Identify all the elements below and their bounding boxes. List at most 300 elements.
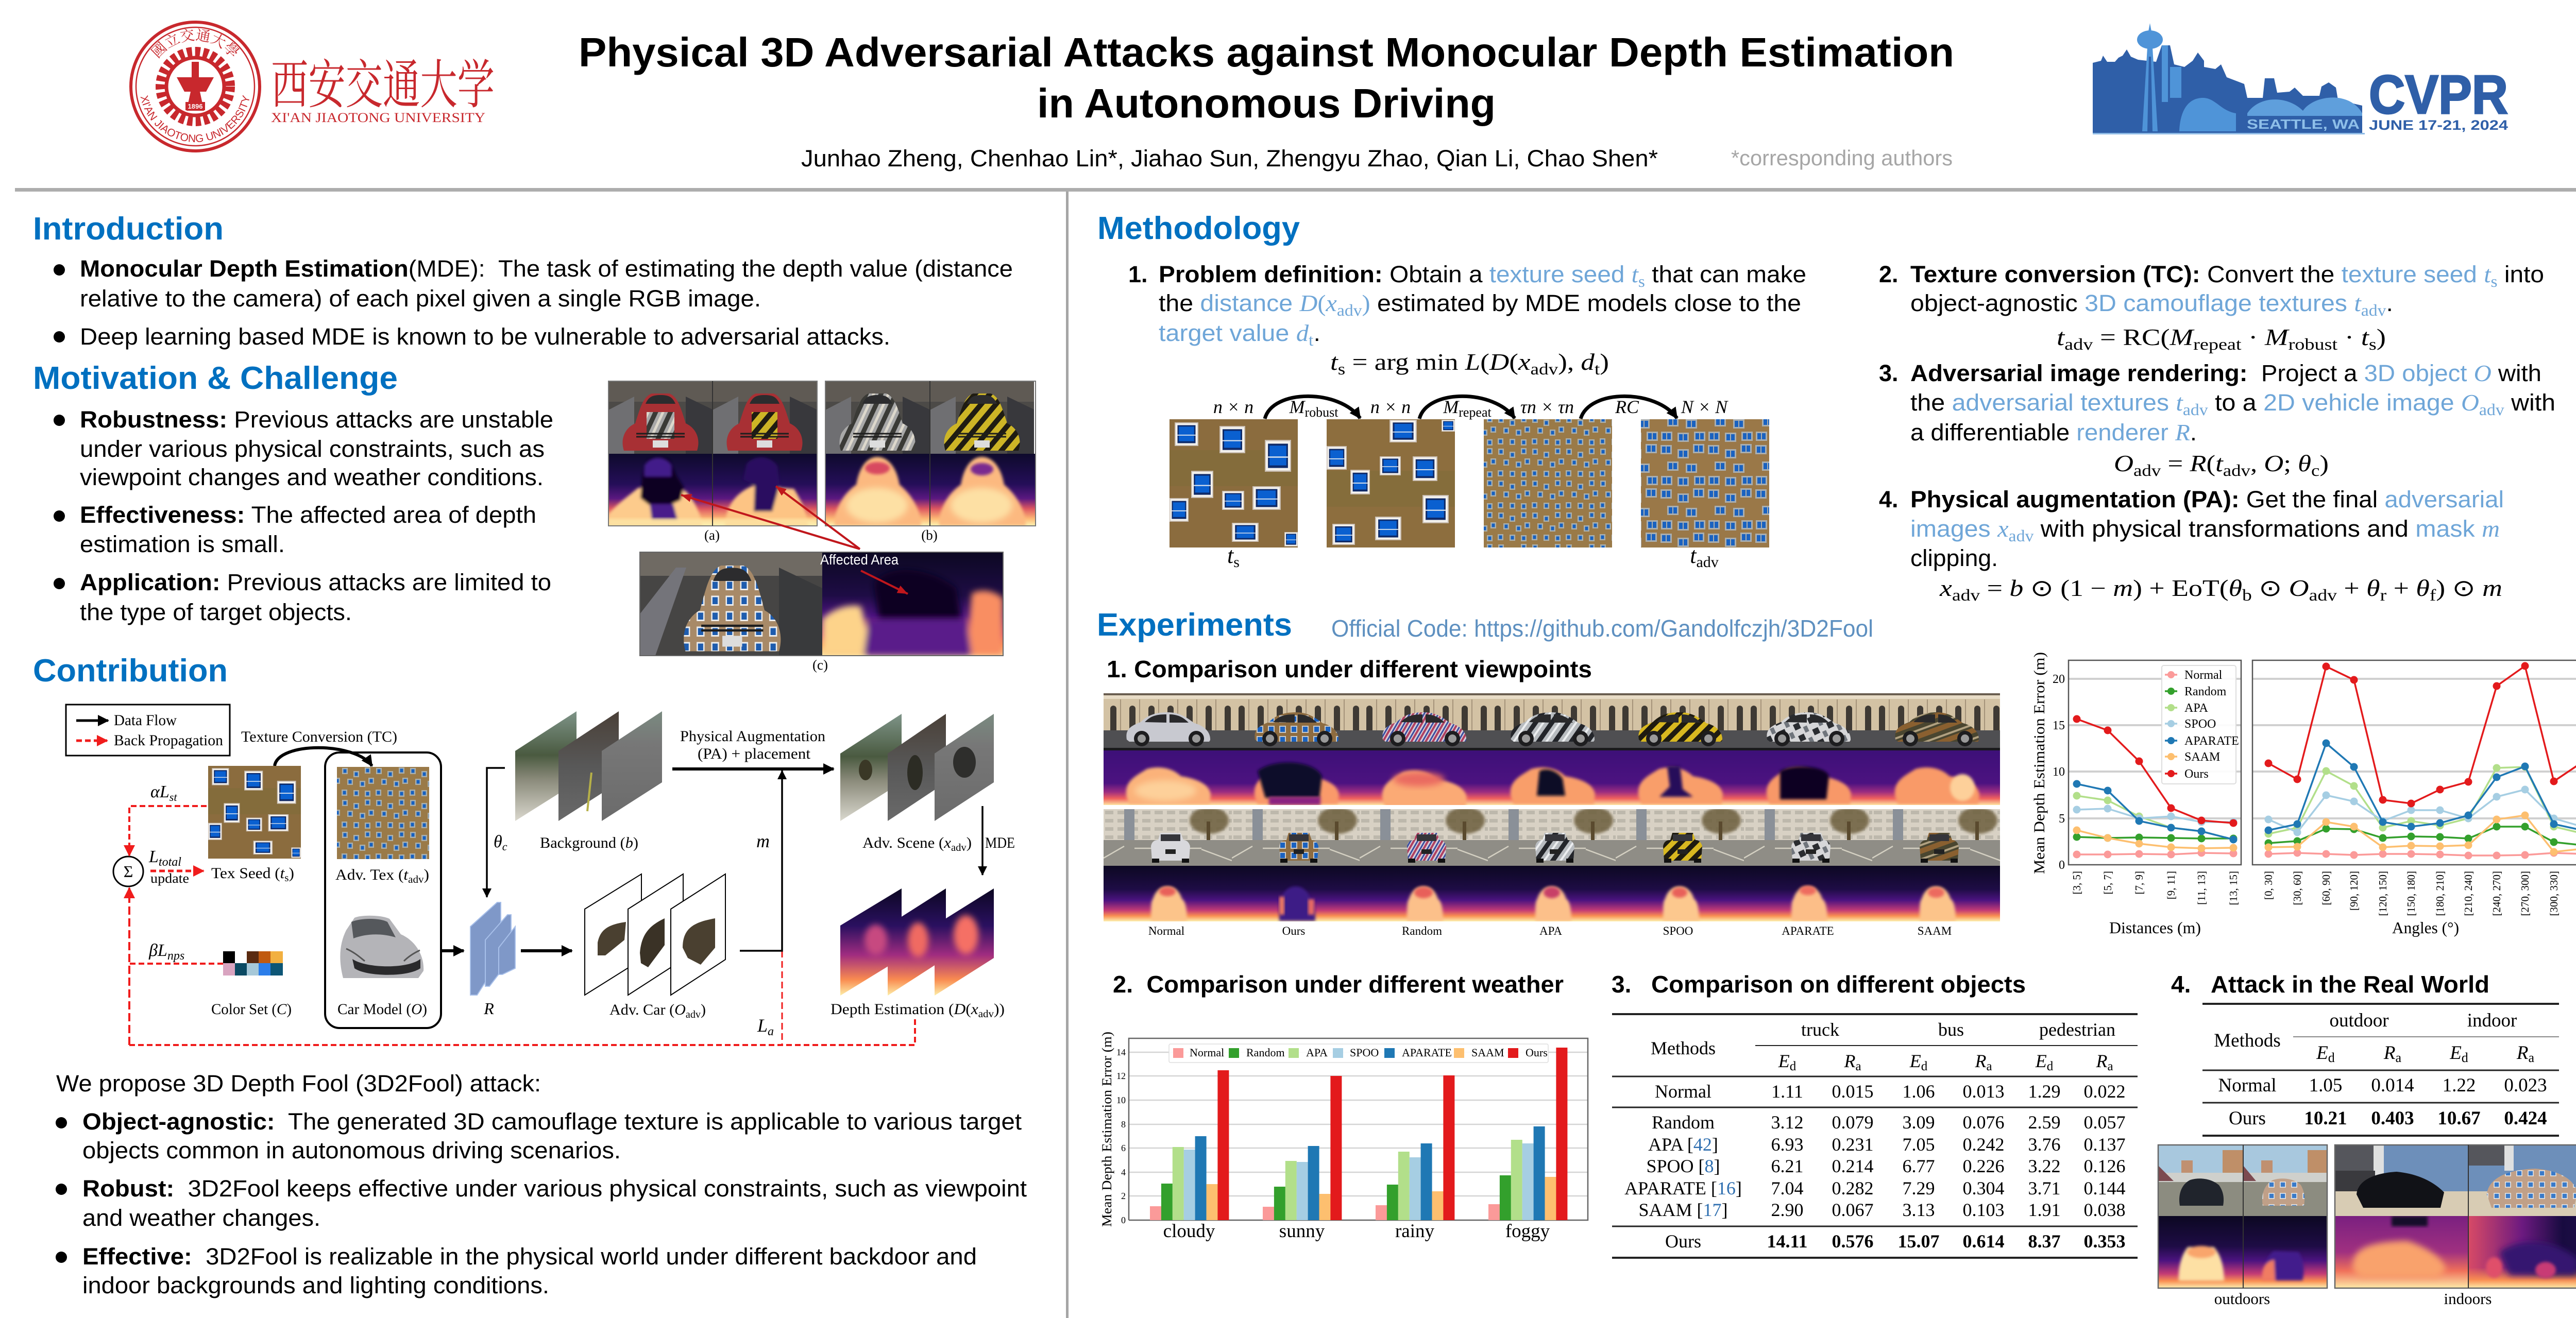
arrow: TC: [275, 748, 372, 766]
row: SAAM: 2.90: [1771, 1200, 1803, 1220]
logo: CVPR 2024 Seattle: SEATTLE, WA: [2247, 116, 2360, 132]
label: Depth Estimation: Depth Estimation ( D(x: [831, 1001, 978, 1018]
x tick labels: angles: [30, 60]: [2291, 871, 2303, 905]
y axis label and ticks: 6: [1121, 1143, 1126, 1153]
row: SAAM: 0.067: [1832, 1200, 1873, 1220]
row: APARATE: APARATE [16]: [1624, 1178, 1742, 1199]
formula: t_s: = arg min: [1345, 349, 1465, 375]
authors: Junhao Zheng, Chenhao Lin*, Jiahao Sun, Zhengyu Zhao, Qian Li, Chao Shen*: [801, 145, 1658, 172]
formula: x_adv: adv: [1952, 586, 1980, 604]
column labels: SPOO: [1663, 925, 1693, 937]
label: Adv Car: ): [701, 1001, 706, 1018]
motivation bullets: viewpoint changes and weather conditions.: [80, 464, 544, 490]
y axis label and ticks: 20: [2053, 673, 2065, 686]
arrow: affected area callouts: [681, 486, 908, 594]
method step 3: adversarial image rendering: 3.: [1879, 360, 1899, 386]
header rule: [15, 188, 2576, 192]
introduction bullets: [54, 255, 1013, 350]
column labels: [1148, 925, 1952, 937]
x tick labels: distances: [13, 15]: [2227, 871, 2240, 905]
legend: line chart: [2162, 665, 2239, 784]
method step 2: texture conversion: adv: [2361, 301, 2386, 319]
subheading: attack in the real world: 4.: [2171, 971, 2191, 998]
legend: bar chart: APARATE: [1402, 1046, 1452, 1059]
contribution text: and weather changes.: [82, 1205, 320, 1231]
row: Normal: 1.05: [2309, 1075, 2342, 1096]
legend: line chart: Normal: [2184, 669, 2223, 682]
method step 2: texture conversion: into: [2498, 261, 2544, 287]
texture size labels: robust: [1304, 405, 1338, 420]
label: L_a: L: [757, 1015, 768, 1036]
table header: [2214, 1010, 2535, 1065]
contribution text: Robust: 3D2Fool keeps effective under various physical constraints, such as viewpoint: [82, 1175, 1027, 1202]
row: Ours: 15.07: [1898, 1231, 1939, 1252]
table header: E: [1778, 1051, 1790, 1071]
x tick labels: angles: [2262, 871, 2576, 916]
contribution text: Object-agnostic: The generated 3D camouflage texture is applicable to various target: [82, 1108, 1022, 1135]
row: SPOO: 0.126: [2083, 1156, 2126, 1176]
label: Color Set: Color Set (C): [211, 1001, 292, 1018]
label: Adv Scene: ): [967, 834, 972, 851]
logo: Xi'an Jiaotong University: 1896: [188, 102, 202, 110]
texture size labels: n × n: [1213, 397, 1253, 417]
category labels: foggy: [1505, 1221, 1550, 1242]
legend: bar chart: [1169, 1044, 1548, 1063]
line charts: depth error vs distance and angle: [2031, 652, 2576, 937]
table header: R: [2516, 1042, 2529, 1064]
label: beta L_nps: nps: [167, 949, 184, 963]
method step 4: physical augmentation: images x: [1910, 516, 2008, 542]
heading: Introduction: Introduction: [33, 211, 224, 247]
x tick labels: distances: [2071, 871, 2240, 905]
label: alpha L_st: st: [170, 791, 177, 803]
x tick labels: distances: [3, 5]: [2071, 871, 2083, 894]
logo: Xi'an Jiaotong University: [129, 21, 495, 152]
row: Ours: [1665, 1231, 2126, 1252]
column labels: Normal: [1148, 925, 1184, 937]
legend: line chart: Random: [2184, 685, 2227, 698]
method step 2: texture conversion: Texture conversion (TC): Convert the texture seed t: [1910, 261, 2490, 287]
image: tex seed: [208, 766, 301, 859]
arrow: background camera: [487, 768, 505, 897]
y axis label and ticks: 12: [1116, 1071, 1126, 1081]
method step 4: physical augmentation: with physical transformations and: [2033, 516, 2415, 542]
caption (b): (b): [921, 527, 938, 543]
formula: t_adv: t: [2361, 324, 2370, 350]
contribution text: [56, 1070, 1027, 1298]
table header: E: [1909, 1051, 1921, 1071]
formula: x_adv: b ⊙ (1 − m) + EoT( θ: [2009, 575, 2240, 601]
logo: Xi'an Jiaotong University: XI'AN JIAOTONG UNIVERSITY: [140, 95, 249, 142]
row: Normal: 1.06: [1902, 1081, 1935, 1102]
y axis label and ticks: 15: [2053, 719, 2065, 732]
method step 2: texture conversion: s: [2491, 272, 2498, 290]
row: APARATE: 0.144: [2083, 1178, 2126, 1199]
label: Background: Background (b): [540, 834, 638, 851]
method step 3: adversarial image rendering: to a: [2208, 389, 2263, 416]
introduction bullets: Deep learning based MDE is known to be vulnerable to adversarial attacks.: [80, 323, 890, 350]
legend: line chart: Ours: [2184, 767, 2209, 781]
legend: line chart: SAAM: [2184, 750, 2220, 764]
plot frame: [1129, 1038, 1588, 1220]
formula: x_adv: θ: [2416, 575, 2430, 601]
legend: line chart: SPOO: [2184, 717, 2216, 731]
method step 3: adversarial image rendering: 2D vehicle image O: [2263, 389, 2478, 416]
table header: d: [1921, 1059, 1928, 1073]
x tick labels: angles: [90, 120]: [2348, 871, 2360, 911]
formula: t_adv: robust: [2289, 335, 2337, 353]
method step 4: physical augmentation: Physical augmentation (PA): Get the final adversarial: [1910, 486, 2504, 512]
legend: Back Propagation: [114, 732, 223, 749]
label: Adv Tex: ): [424, 866, 429, 883]
label: Adv Scene: adv: [951, 842, 967, 853]
loss paths: [129, 806, 915, 1045]
label: Physical Augmentation: [680, 728, 825, 762]
table header: a: [2529, 1050, 2535, 1065]
row: SPOO: 6.77: [1902, 1156, 1935, 1176]
color set swatches: [223, 951, 283, 975]
motivation bullets: estimation is small.: [80, 531, 285, 557]
row: Ours: 0.403: [2371, 1108, 2414, 1129]
method step 2: texture conversion: 2.: [1879, 261, 1899, 287]
bars: rainy: [1376, 1075, 1454, 1220]
subheading: comparison on different objects: Comparison on different objects: [1651, 971, 2026, 998]
formula: x_adv: b: [2242, 586, 2252, 604]
table header: d: [2462, 1050, 2468, 1065]
row: Random: 3.12: [1771, 1112, 1803, 1133]
row: Normal: [2218, 1075, 2547, 1096]
table header: d: [1790, 1059, 1797, 1073]
label: alpha L_st: αL: [150, 782, 170, 801]
real world images: outdoors: [2158, 1145, 2327, 1288]
arrows between textures: [1265, 396, 1677, 419]
formula: x_adv: r: [2380, 586, 2387, 604]
row: APA: 0.137: [2083, 1134, 2126, 1155]
texture size labels: N × N: [1681, 397, 1728, 417]
image: seed texture: [1170, 419, 1298, 547]
row: Normal: 1.29: [2028, 1081, 2061, 1102]
texture size labels: [1213, 397, 1728, 571]
real world images: indoors: [2335, 1145, 2576, 1288]
y axis label and ticks: 10: [1116, 1095, 1126, 1105]
pipeline diagram: [66, 705, 1015, 1045]
row: SPOO: 0.226: [1963, 1156, 2004, 1176]
formula: t_s: t: [1595, 360, 1600, 378]
column labels: APARATE: [1782, 925, 1834, 937]
label: Adv Tex: adv: [408, 874, 424, 885]
row: Random: Random: [1652, 1112, 1715, 1133]
image panel (a) and (b) scenes and depths: [608, 381, 1036, 526]
bars: cloudy: [1150, 1070, 1229, 1220]
table header: truck: [1801, 1019, 1839, 1040]
row: SPOO: 6.21: [1771, 1156, 1803, 1176]
label: Adv Car: Adv. Car (O: [609, 1001, 686, 1018]
row: Ours: 10.67: [2437, 1108, 2481, 1129]
table: different objects: [1612, 1014, 2138, 1258]
texture size labels: RC: [1615, 397, 1639, 417]
y axis label and ticks: 0: [1121, 1215, 1126, 1225]
method step 4: physical augmentation: 4.: [1879, 486, 1899, 512]
category labels: [1163, 1221, 1550, 1242]
x tick labels: distances: [5, 7]: [2102, 871, 2114, 894]
label: m: m: [756, 831, 770, 851]
column labels: Random: [1402, 925, 1442, 937]
formula: t_adv: M: [2264, 324, 2290, 350]
x tick labels: angles: [60, 90]: [2320, 871, 2332, 905]
image: depth stack: [840, 888, 994, 996]
formula: x_adv: m: [2482, 575, 2502, 601]
row: Ours: 0.424: [2504, 1108, 2547, 1129]
row: APARATE: 0.304: [1963, 1178, 2004, 1199]
subheading: comparison under different weather: 2. Comparison under different weather: [1113, 971, 1564, 998]
label: Tex Seed: s: [284, 872, 289, 884]
introduction bullets: Monocular Depth Estimation (MDE): The task of estimating the depth value (distance: [80, 255, 1013, 282]
legend: line chart: APARATE: [2184, 734, 2239, 748]
image: car model: [340, 916, 423, 978]
motivation bullets: Application: Previous attacks are limited to: [80, 569, 551, 595]
category labels: sunny: [1279, 1221, 1325, 1242]
bar chart: weather comparison: [1099, 1032, 1588, 1242]
image grid: viewpoint comparison: [1104, 693, 2001, 937]
label: Affected Area: Affected Area: [820, 552, 899, 568]
method step 3: adversarial image rendering: [1879, 360, 2555, 480]
table header: E: [2449, 1042, 2462, 1064]
table: real world: [2202, 1004, 2559, 1136]
row: APA: 6.93: [1771, 1134, 1803, 1155]
contribution text: We propose 3D Depth Fool (3D2Fool) attack:: [56, 1070, 541, 1097]
motivation bullets: [54, 406, 553, 625]
method step 1: problem definition: Problem definition: Obtain a texture seed t: [1159, 261, 1638, 287]
contribution text: indoor backgrounds and lighting conditions.: [82, 1272, 549, 1298]
table header: Methods: [1651, 1038, 1716, 1058]
y axis label and ticks: 4: [1121, 1167, 1126, 1177]
table header: R: [1843, 1051, 1855, 1071]
method step 1: problem definition: adv: [1337, 301, 1362, 319]
row: Random: 3.09: [1902, 1112, 1935, 1133]
x tick labels: angles: [180, 210]: [2434, 871, 2446, 916]
row: Normal: 0.023: [2504, 1075, 2547, 1096]
logo: CVPR 2024 Seattle: CVPR: [2369, 64, 2508, 125]
category labels: cloudy: [1163, 1221, 1215, 1242]
texture size labels: τn × τn: [1520, 397, 1574, 417]
legend: [66, 705, 230, 756]
legend: bar chart: Ours: [1526, 1046, 1548, 1059]
table header: Methods: [2214, 1030, 2281, 1051]
label: Tex Seed: ): [289, 865, 294, 882]
method step 4: physical augmentation: mask m: [2415, 516, 2499, 542]
method step 1: problem definition: estimated by MDE models close to the: [1377, 290, 1772, 316]
formula: t_s: ): [1600, 349, 1609, 375]
title: Physical 3D Adversarial Attacks against Monocular Depth Estimation: [579, 29, 1954, 75]
label: MDE: MDE: [985, 834, 1015, 851]
row: Normal: 1.22: [2443, 1075, 2476, 1096]
label: L_a: a: [768, 1025, 774, 1038]
formula: O_adv: ): [2319, 451, 2329, 476]
table header: outdoor: [2329, 1010, 2389, 1031]
logo: Xi'an Jiaotong University: 西安交通大学: [271, 57, 495, 115]
row: Random: 0.076: [1963, 1112, 2004, 1133]
box: adv tex and car model: [325, 752, 441, 1028]
table header: d: [2047, 1059, 2054, 1073]
official code link: Official Code: https://github.com/Gandolfczjh/3D2Fool: [1331, 615, 1873, 642]
method step 3: adversarial image rendering: with: [2504, 389, 2555, 416]
image: adversarial texture: [1641, 419, 1769, 547]
row 1 depth maps: [1104, 750, 2000, 807]
formula: x_adv: +: [2337, 575, 2366, 601]
row: Normal: Normal: [1655, 1081, 1711, 1102]
y axis label and ticks: 8: [1121, 1119, 1126, 1129]
row: APA: 0.242: [1963, 1134, 2004, 1155]
row: Normal: 0.015: [1832, 1081, 1873, 1102]
table header: a: [1986, 1059, 1992, 1073]
caption (a): (a): [704, 527, 720, 543]
method step 2: texture conversion: object-agnostic 3D camouflage textures t: [1910, 290, 2361, 316]
arrow: PA: [672, 767, 834, 771]
formula: x_adv: O: [2289, 575, 2309, 601]
formula: t_adv: = RC(: [2093, 324, 2170, 350]
x tick labels: angles: [270, 300]: [2519, 871, 2531, 916]
x tick labels: angles: [0, 30]: [2262, 871, 2275, 900]
method step 3: adversarial image rendering: the adversarial textures t: [1910, 389, 2182, 416]
method step 1: problem definition: s: [1638, 272, 1645, 290]
figure: previous attack examples (a) (b) (c): [608, 381, 1036, 673]
y axis label and ticks: 0: [2059, 859, 2065, 872]
motivation bullets: Robustness: Previous attacks are unstable: [80, 406, 553, 433]
renderer block R: [470, 902, 515, 995]
logo: CVPR 2024 Seattle: JUNE 17-21, 2024: [2369, 117, 2508, 133]
table header: pedestrian: [2039, 1019, 2115, 1040]
row: APARATE: [1624, 1178, 2126, 1199]
row: Ours: 8.37: [2028, 1231, 2061, 1252]
row: SPOO: 0.214: [1832, 1156, 1873, 1176]
method step 2: texture conversion: .: [2386, 290, 2393, 316]
formula: t_s: d: [1581, 349, 1595, 375]
formula: O_adv: adv: [2133, 461, 2161, 480]
method step 1: problem definition: ): [1362, 290, 1370, 316]
texture conversion strip: [1170, 396, 1769, 571]
method step 1: problem definition: target value d: [1159, 320, 1308, 346]
row: SAAM: 3.13: [1902, 1200, 1935, 1220]
label: Physical Augmentation: Physical Augmentation: [680, 728, 825, 745]
row: Ours: 0.353: [2083, 1231, 2126, 1252]
label: Adv Scene: Adv. Scene (x: [862, 834, 951, 851]
image: robust texture: [1327, 419, 1455, 547]
row: Ours: 10.21: [2304, 1108, 2347, 1129]
legend: line chart: APA: [2184, 701, 2208, 715]
y axis label and ticks: [1099, 1032, 1126, 1227]
row: Random: [1652, 1112, 2126, 1133]
label: Depth Estimation: adv: [978, 1008, 994, 1020]
texture size labels: M: [1289, 397, 1306, 417]
row: Random: 0.079: [1832, 1112, 1873, 1133]
label: L_total: total: [159, 855, 181, 869]
x tick labels: angles: [240, 270]: [2490, 871, 2503, 916]
row: APA: 0.231: [1832, 1134, 1873, 1155]
texture size labels: repeat: [1459, 405, 1492, 420]
row: Normal: [1655, 1081, 2126, 1102]
label: Sigma node: [113, 857, 143, 886]
texture size labels: M: [1443, 397, 1460, 417]
formula: t_adv: ·: [2242, 324, 2265, 350]
method step 1: problem definition: [1128, 261, 1806, 378]
legend: Data Flow: [114, 712, 177, 729]
formula: O_adv: adv: [2223, 461, 2250, 480]
legend: bar chart: Normal: [1190, 1046, 1224, 1059]
table header: a: [1855, 1059, 1861, 1073]
table header: R: [2095, 1051, 2107, 1071]
series: distances panel: [2077, 719, 2233, 854]
method step 1: problem definition: that can make: [1645, 261, 1806, 287]
table header: R: [2383, 1042, 2396, 1064]
column labels: SAAM: [1918, 925, 1952, 937]
x tick labels: distances: [11, 13]: [2195, 871, 2208, 905]
x axis title: Angles: Angles (°): [2392, 918, 2459, 937]
label: Tex Seed: Tex Seed (t: [211, 865, 284, 882]
series: angles panel: [2268, 666, 2576, 855]
row: Ours: 14.11: [1767, 1231, 1808, 1252]
formula: x_adv: +: [2386, 575, 2416, 601]
label: R: R: [483, 999, 494, 1018]
formula: O_adv: ,: [2250, 451, 2264, 476]
row: SAAM: 0.103: [1963, 1200, 2004, 1220]
table header: bus: [1938, 1019, 1964, 1040]
formula: t_adv: repeat: [2193, 335, 2242, 353]
formula: t_s: ),: [1558, 349, 1581, 375]
caption: indoors: indoors: [2444, 1290, 2492, 1308]
heading: Methodology: Methodology: [1097, 211, 1300, 246]
label: update: update: [150, 871, 189, 886]
introduction bullets: relative to the camera) of each pixel given a single RGB image.: [80, 285, 761, 312]
arrow: MDE: [981, 806, 984, 875]
label: Adv Car: adv: [686, 1009, 701, 1020]
method step 3: adversarial image rendering: Adversarial image rendering: Project a 3D object O with: [1910, 360, 2541, 386]
row: Ours: [2229, 1108, 2547, 1129]
formula: x_adv: f: [2430, 586, 2436, 604]
row: Ours: Ours: [2229, 1108, 2266, 1129]
texture size labels: adv: [1696, 554, 1719, 571]
table header: a: [2107, 1059, 2113, 1073]
bars: sunny: [1263, 1076, 1342, 1220]
texture size labels: n × n: [1370, 397, 1411, 417]
label: Car Model: Car Model (O): [337, 1001, 427, 1018]
row: SPOO: 3.22: [2028, 1156, 2061, 1176]
row: APARATE: 0.282: [1832, 1178, 1873, 1199]
formula: x_adv: adv: [2309, 586, 2337, 604]
logo: Xi'an Jiaotong University: XI'AN JIAOTONG UNIVERSITY: [271, 110, 485, 125]
motivation bullets: under various physical constraints, such as: [80, 436, 545, 462]
category labels: rainy: [1395, 1221, 1435, 1242]
formula: x_adv: θ: [2366, 575, 2380, 601]
formula: x_adv: ⊙: [2252, 575, 2289, 601]
row: APARATE: 7.29: [1902, 1178, 1935, 1199]
row: APA: 7.05: [1902, 1134, 1935, 1155]
label: L_total: L: [149, 847, 159, 866]
x axis title: Distances: Distances (m): [2109, 918, 2201, 937]
label: Physical Augmentation: (PA) + placement: [698, 745, 811, 762]
corresponding authors note: *corresponding authors: [1731, 146, 1953, 170]
x tick labels: angles: [210, 240]: [2462, 871, 2475, 916]
arrow: adv car mask: [740, 771, 782, 951]
label: theta c: θ: [494, 832, 502, 851]
logo: Xi'an Jiaotong University: 國立交通大學: [150, 28, 239, 59]
formula: O_adv: O; θ: [2264, 451, 2309, 476]
label: Adv Tex: Adv. Tex (t: [335, 866, 408, 883]
formula: O_adv: R(t: [2190, 451, 2222, 476]
caption: outdoors: outdoors: [2214, 1290, 2270, 1308]
row: SAAM: 0.038: [2083, 1200, 2126, 1220]
method step 1: problem definition: .: [1314, 320, 1320, 346]
row: Normal: 1.11: [1771, 1081, 1803, 1102]
